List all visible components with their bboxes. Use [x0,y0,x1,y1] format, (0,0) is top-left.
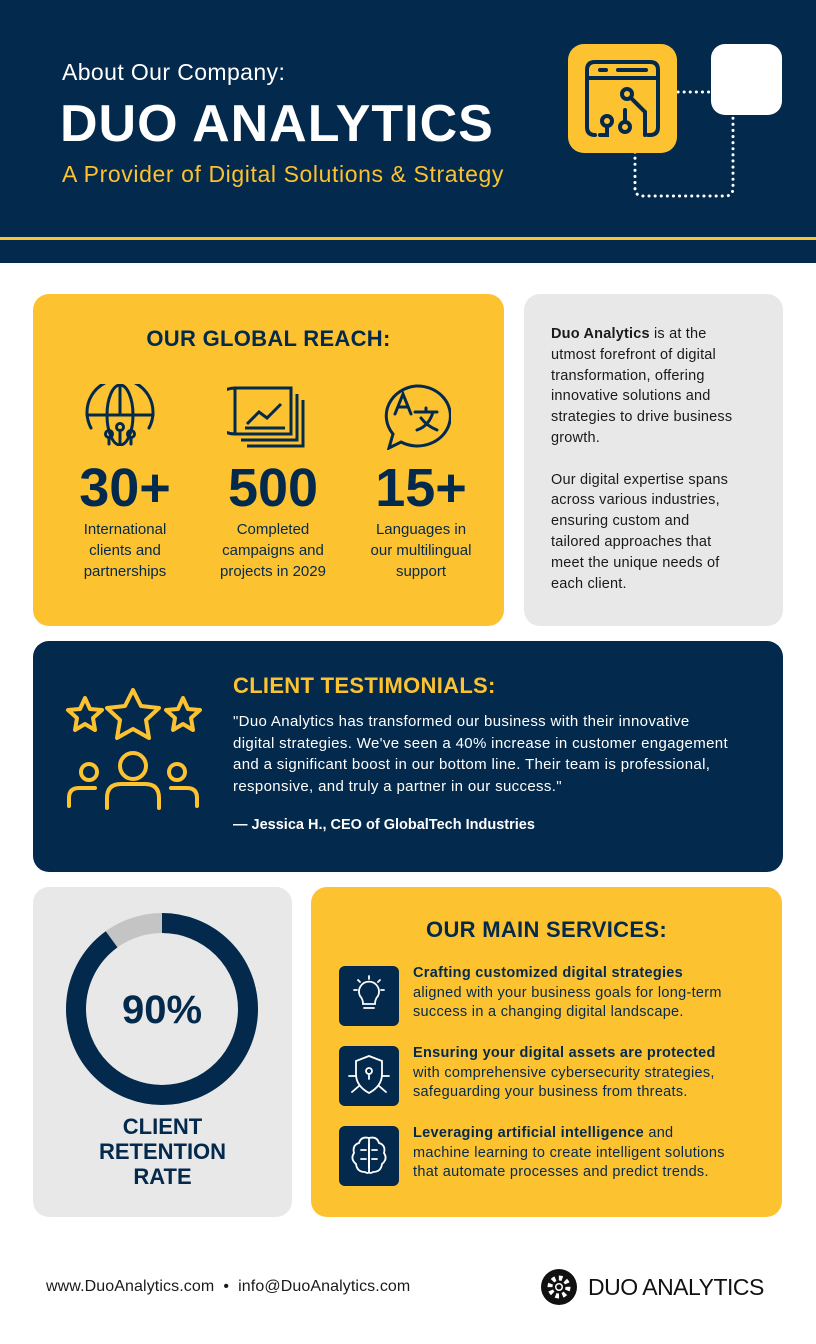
icon: stars and people [66,688,202,810]
title: DUO ANALYTICS [60,95,494,153]
stat: clients [79,458,171,580]
service 1 [339,965,722,1026]
description: utmost forefront of digital [551,347,716,363]
stat: languages: our multilingual [371,542,471,559]
service 2: safeguarding your business from threats. [413,1084,688,1100]
quote: "Duo Analytics has transformed our business with their innovative [233,713,690,730]
icon: lightbulb [339,966,399,1026]
stat: clients: International [84,521,166,538]
stat: clients: 30+ [79,458,171,518]
stat: languages: Languages in [376,521,466,538]
label: CLIENT [123,1114,202,1139]
header band [0,0,816,263]
heading: OUR MAIN SERVICES: [426,917,667,942]
service 2: with comprehensive cybersecurity strategies, [413,1064,715,1080]
service 3: machine learning to create intelligent solutions [413,1144,725,1160]
service 2 [339,1045,716,1106]
service 2: Ensuring your digital assets are protected [413,1045,716,1061]
service 3 [339,1125,725,1186]
description: tailored approaches that [551,534,711,550]
stat: languages [371,458,471,580]
footer contact: www.DuoAnalytics.com • info@DuoAnalytics.com [46,1278,410,1295]
tagline: A Provider of Digital Solutions & Strategy [62,161,504,187]
donut chart: 90% [122,988,202,1032]
description: meet the unique needs of [551,555,719,571]
footer logo: DUO ANALYTICS [588,1274,764,1300]
icon: gear [541,1269,577,1305]
quote: digital strategies. We've seen a 40% increase in customer engagement [233,734,728,752]
quote: responsive, and truly a partner in our success." [233,778,562,794]
donut chart [66,913,258,1105]
description: across various industries, [551,492,720,508]
icon: globe [86,384,154,446]
heading: OUR GLOBAL REACH: [146,326,391,351]
description: ensuring custom and [551,513,689,529]
quote: and a significant boost in our bottom line. Their team is professional, [233,756,710,773]
attribution: — Jessica H., CEO of GlobalTech Industries [233,817,535,833]
description: strategies to drive business [551,409,732,425]
subtitle: about: About Our Company: [62,59,285,85]
service 1: Crafting customized digital strategies [413,965,683,981]
panel: retention [33,887,292,1217]
description [551,326,732,592]
stat: languages: 15+ [375,458,467,518]
panel: services [311,887,782,1217]
description: Our digital expertise spans [551,472,728,488]
stat: clients: clients and [89,542,161,559]
quote [233,713,728,794]
icon: document stack [227,386,304,448]
icon: brain [339,1126,399,1186]
stat: clients: partnerships [84,563,166,580]
stat: campaigns: Completed [237,521,309,538]
stat: campaigns: campaigns and [222,542,324,559]
heading: CLIENT TESTIMONIALS: [233,673,496,698]
header illustration [568,44,782,198]
stat: campaigns: projects in 2029 [220,563,326,580]
label: RATE [133,1164,192,1189]
label [99,1114,226,1189]
description: each client. [551,576,627,592]
divider line [0,237,816,240]
service 1: success in a changing digital landscape. [413,1004,684,1020]
panel: global reach [33,294,504,626]
service 3: Leveraging artificial intelligence and [413,1125,673,1141]
description: growth. [551,430,600,446]
description: innovative solutions and [551,388,711,404]
panel: testimonials [33,641,783,872]
label: RETENTION [99,1139,226,1164]
panel: about text [524,294,783,626]
icon: shield [339,1046,399,1106]
description: Duo Analytics is at the [551,326,707,342]
icon: translation bubble [384,384,451,450]
stat: languages: support [396,563,446,580]
service 3: that automate processes and predict trends. [413,1164,709,1180]
stat: campaigns [220,458,326,580]
stat: campaigns: 500 [228,458,318,518]
footer logo [541,1269,764,1305]
description: transformation, offering [551,368,705,384]
service 1: aligned with your business goals for long-term [413,984,722,1000]
